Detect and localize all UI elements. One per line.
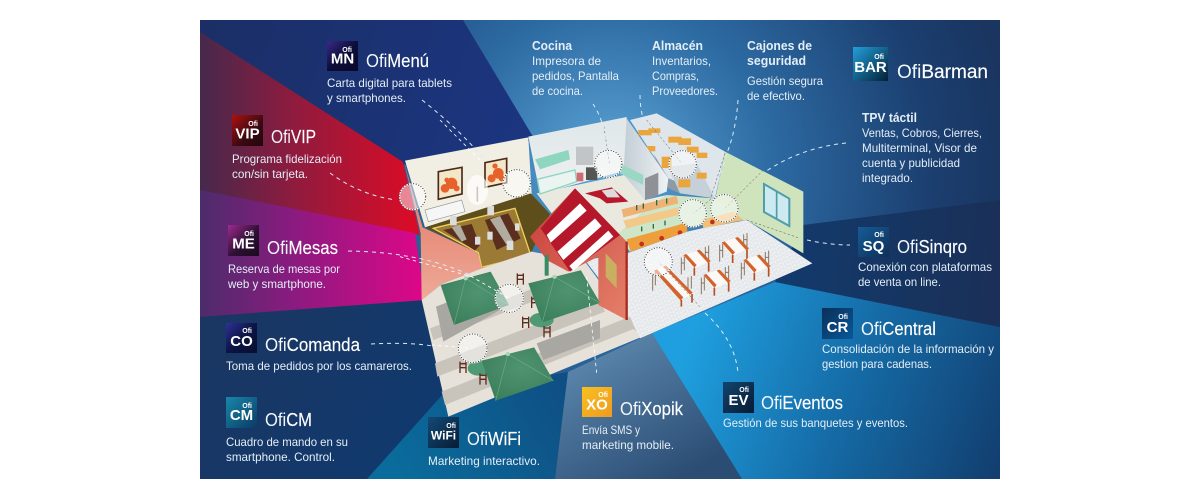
OfiMesas: OfiMesas bbox=[267, 238, 338, 258]
OfiCM: smartphone. Control. bbox=[226, 450, 335, 464]
event tables bbox=[653, 233, 771, 307]
icon: CM: Ofi bbox=[242, 403, 252, 410]
OfiSinqro: OfiSinqro bbox=[897, 237, 967, 257]
OfiVIP: Programa fidelización bbox=[232, 152, 342, 166]
kitchen bbox=[528, 117, 668, 237]
OfiVIP: con/sin tarjeta. bbox=[232, 167, 308, 181]
Almacén bbox=[652, 39, 718, 98]
icon: BAR: BAR bbox=[854, 59, 887, 76]
OfiCM bbox=[226, 397, 348, 464]
icon: CO: CO bbox=[230, 333, 253, 350]
OfiMenú: Carta digital para tablets bbox=[327, 76, 452, 90]
icon: VIP: VIP bbox=[235, 126, 260, 142]
icon: CM bbox=[226, 397, 257, 428]
icon: CR: Ofi bbox=[838, 314, 848, 321]
Almacén: Compras, bbox=[652, 69, 699, 83]
Cajones de seguridad: seguridad bbox=[747, 54, 806, 68]
icon: EV: EV bbox=[728, 392, 749, 409]
striped awning bbox=[541, 188, 620, 272]
dashed leader lines bbox=[330, 95, 850, 373]
Cocina: pedidos, Pantalla bbox=[532, 69, 619, 83]
bar bbox=[617, 195, 751, 252]
icon: SQ: SQ bbox=[863, 238, 885, 255]
dashed leaders inside the plan bbox=[400, 120, 800, 373]
icon: VIP bbox=[232, 115, 263, 146]
OfiCentral bbox=[822, 308, 994, 371]
TPV táctil: Multiterminal, Visor de bbox=[862, 141, 977, 155]
icon: SQ: Ofi bbox=[874, 232, 884, 239]
icon: ME: ME bbox=[232, 236, 255, 252]
right green wall with window bbox=[715, 152, 803, 253]
Cocina: de cocina. bbox=[532, 84, 583, 98]
Cajones de seguridad: de efectivo. bbox=[747, 89, 805, 103]
icon: CR: CR bbox=[827, 319, 848, 336]
terrace floor bbox=[422, 252, 641, 417]
OfiMesas: web y smartphone. bbox=[227, 277, 326, 291]
TPV táctil: cuenta y publicidad bbox=[862, 156, 960, 170]
icon: XO: Ofi bbox=[598, 392, 608, 399]
Cocina: Cocina bbox=[532, 39, 573, 53]
icon: MN: MN bbox=[331, 50, 354, 68]
OfiMesas: Reserva de mesas por bbox=[228, 262, 340, 276]
icon: CM: CM bbox=[230, 407, 253, 424]
TPV táctil: Ventas, Cobros, Cierres, bbox=[862, 126, 982, 140]
OfiMesas bbox=[227, 225, 340, 291]
icon: EV: Ofi bbox=[739, 387, 749, 394]
icon: BAR: Ofi bbox=[874, 54, 884, 61]
Cocina bbox=[532, 39, 619, 98]
OfiVIP bbox=[232, 115, 342, 181]
icon: WiFi: Ofi bbox=[446, 423, 456, 430]
OfiComanda: Toma de pedidos por los camareros. bbox=[226, 359, 412, 373]
OfiCentral: gestion para cadenas. bbox=[822, 357, 932, 371]
OfiWiFi bbox=[428, 417, 540, 468]
OfiBarman bbox=[853, 47, 988, 83]
storage room bbox=[630, 113, 725, 198]
OfiXopik: marketing mobile. bbox=[582, 438, 674, 452]
umbrellas bbox=[441, 270, 600, 401]
icon: WiFi: WiFi bbox=[431, 428, 456, 442]
left wall bbox=[404, 162, 547, 300]
icon: BAR bbox=[853, 47, 888, 81]
background rays bbox=[200, 20, 1000, 479]
OfiBarman: OfiBarman bbox=[897, 62, 988, 83]
OfiMenú: y smartphones. bbox=[327, 91, 406, 105]
Almacén: Almacén bbox=[652, 39, 703, 53]
icon: MN: Ofi bbox=[342, 47, 352, 54]
Almacén: Proveedores. bbox=[652, 84, 718, 98]
facade wall bbox=[530, 188, 627, 320]
OfiMenú bbox=[327, 41, 452, 105]
OfiXopik: Envía SMS y bbox=[582, 423, 640, 437]
OfiCM: OfiCM bbox=[265, 410, 312, 430]
OfiMenú: OfiMenú bbox=[366, 51, 429, 71]
cafe tables bbox=[460, 255, 554, 385]
OfiComanda: OfiComanda bbox=[265, 335, 361, 355]
OfiSinqro bbox=[858, 227, 992, 289]
icon: CO: Ofi bbox=[242, 328, 252, 335]
OfiEventos bbox=[723, 382, 908, 430]
icon: CO bbox=[226, 323, 257, 353]
dotted highlight circles bbox=[400, 150, 738, 363]
OfiEventos: Gestión de sus banquetes y eventos. bbox=[723, 416, 908, 430]
icon: MN bbox=[327, 41, 358, 71]
illustration: restaurant floor plan bbox=[400, 113, 812, 417]
TPV táctil bbox=[862, 111, 982, 185]
dining room bbox=[405, 137, 550, 268]
Cocina: Impresora de bbox=[532, 54, 601, 68]
OfiCentral: Consolidación de la información y bbox=[822, 342, 994, 356]
OfiXopik bbox=[582, 387, 684, 452]
Cajones de seguridad: Gestión segura bbox=[747, 74, 823, 88]
TPV táctil: integrado. bbox=[862, 171, 913, 185]
Cajones de seguridad bbox=[747, 39, 823, 103]
Cajones de seguridad: Cajones de bbox=[747, 39, 812, 53]
OfiCentral: OfiCentral bbox=[861, 319, 936, 339]
TPV táctil: TPV táctil bbox=[862, 111, 917, 125]
OfiEventos: OfiEventos bbox=[761, 393, 843, 413]
OfiVIP: OfiVIP bbox=[271, 127, 316, 147]
icon: ME bbox=[228, 225, 259, 256]
icon: XO bbox=[582, 387, 612, 417]
icon: ME: Ofi bbox=[244, 231, 254, 238]
OfiSinqro: de venta on line. bbox=[858, 275, 941, 289]
icon: SQ bbox=[858, 227, 889, 257]
OfiCM: Cuadro de mando en su bbox=[226, 435, 348, 449]
icon: XO: XO bbox=[586, 396, 608, 414]
OfiSinqro: Conexión con plataformas bbox=[858, 260, 992, 274]
icon: WiFi bbox=[428, 417, 459, 448]
Almacén: Inventarios, bbox=[652, 54, 711, 68]
OfiComanda bbox=[226, 323, 412, 373]
icon: EV bbox=[723, 382, 754, 413]
OfiXopik: OfiXopik bbox=[620, 399, 684, 419]
icon: CR bbox=[822, 308, 853, 339]
icon: VIP: Ofi bbox=[248, 121, 258, 128]
OfiWiFi: Marketing interactivo. bbox=[428, 454, 540, 468]
tile floor bbox=[585, 220, 812, 338]
OfiWiFi: OfiWiFi bbox=[467, 429, 521, 449]
